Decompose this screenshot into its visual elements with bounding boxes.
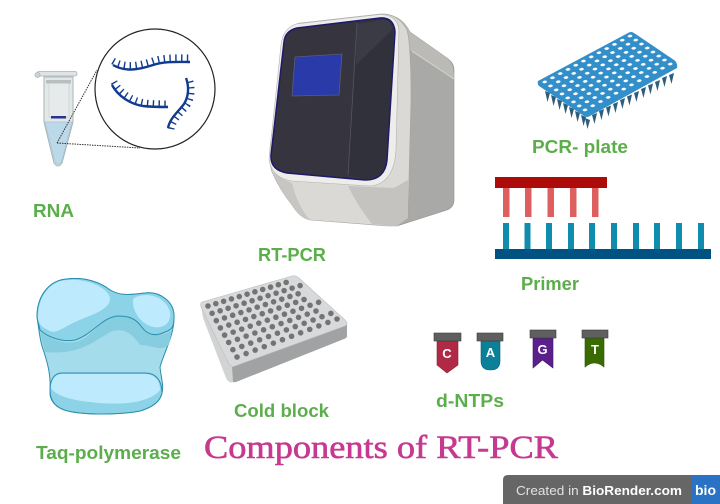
template strand (495, 223, 711, 259)
icon: Taq polymerase (37, 279, 174, 414)
machine side (385, 14, 454, 226)
primer strand (495, 177, 607, 217)
plate teeth (545, 73, 674, 129)
block top surface (201, 276, 347, 366)
magnifier circle (95, 29, 215, 149)
nucleotide C (434, 333, 461, 373)
title: Components of RT-PCR (204, 430, 558, 466)
icon: cold block (201, 276, 347, 382)
dotted zoom lines (57, 70, 140, 148)
nucleotide T (582, 330, 608, 367)
nucleotide C: C (442, 346, 452, 361)
block wells (208, 280, 337, 357)
icon: RNA tube with magnified strands (35, 29, 215, 166)
footer badge: Created in BioRender.com (503, 475, 720, 504)
nucleotide A (477, 333, 503, 370)
polymerase body (37, 279, 174, 414)
footer badge: Created in BioRender.com: Created in BioRender.com (516, 483, 682, 498)
machine front housing (270, 14, 411, 226)
footer badge: Created in BioRender.com: bio (695, 482, 716, 498)
label: d-NTPs: d-NTPs (436, 391, 504, 411)
nucleotide T: T (591, 342, 599, 357)
label: Primer: Primer (521, 274, 579, 294)
plate body (538, 32, 677, 117)
polymerase top lobe (37, 279, 174, 341)
block sides (232, 323, 347, 382)
dark door panel (271, 18, 395, 180)
icon: PCR plate (538, 32, 677, 129)
polymerase lower lobe (50, 373, 162, 414)
label: RNA: RNA (33, 201, 74, 221)
nucleotide G: G (537, 342, 548, 357)
icon: primer annealed to template (495, 177, 711, 259)
nucleotide G (530, 330, 556, 368)
label: PCR- plate: PCR- plate (532, 137, 628, 157)
label: Taq-polymerase: Taq-polymerase (36, 443, 181, 463)
RNA strands (112, 58, 191, 129)
label: Cold block: Cold block (234, 401, 330, 421)
blue screen (292, 54, 342, 96)
label: RT-PCR: RT-PCR (258, 245, 326, 265)
nucleotide A: A (486, 345, 496, 360)
icon: RT-PCR machine (269, 14, 454, 226)
icon: d-NTPs (434, 330, 608, 373)
icon: microcentrifuge tube (35, 72, 77, 166)
